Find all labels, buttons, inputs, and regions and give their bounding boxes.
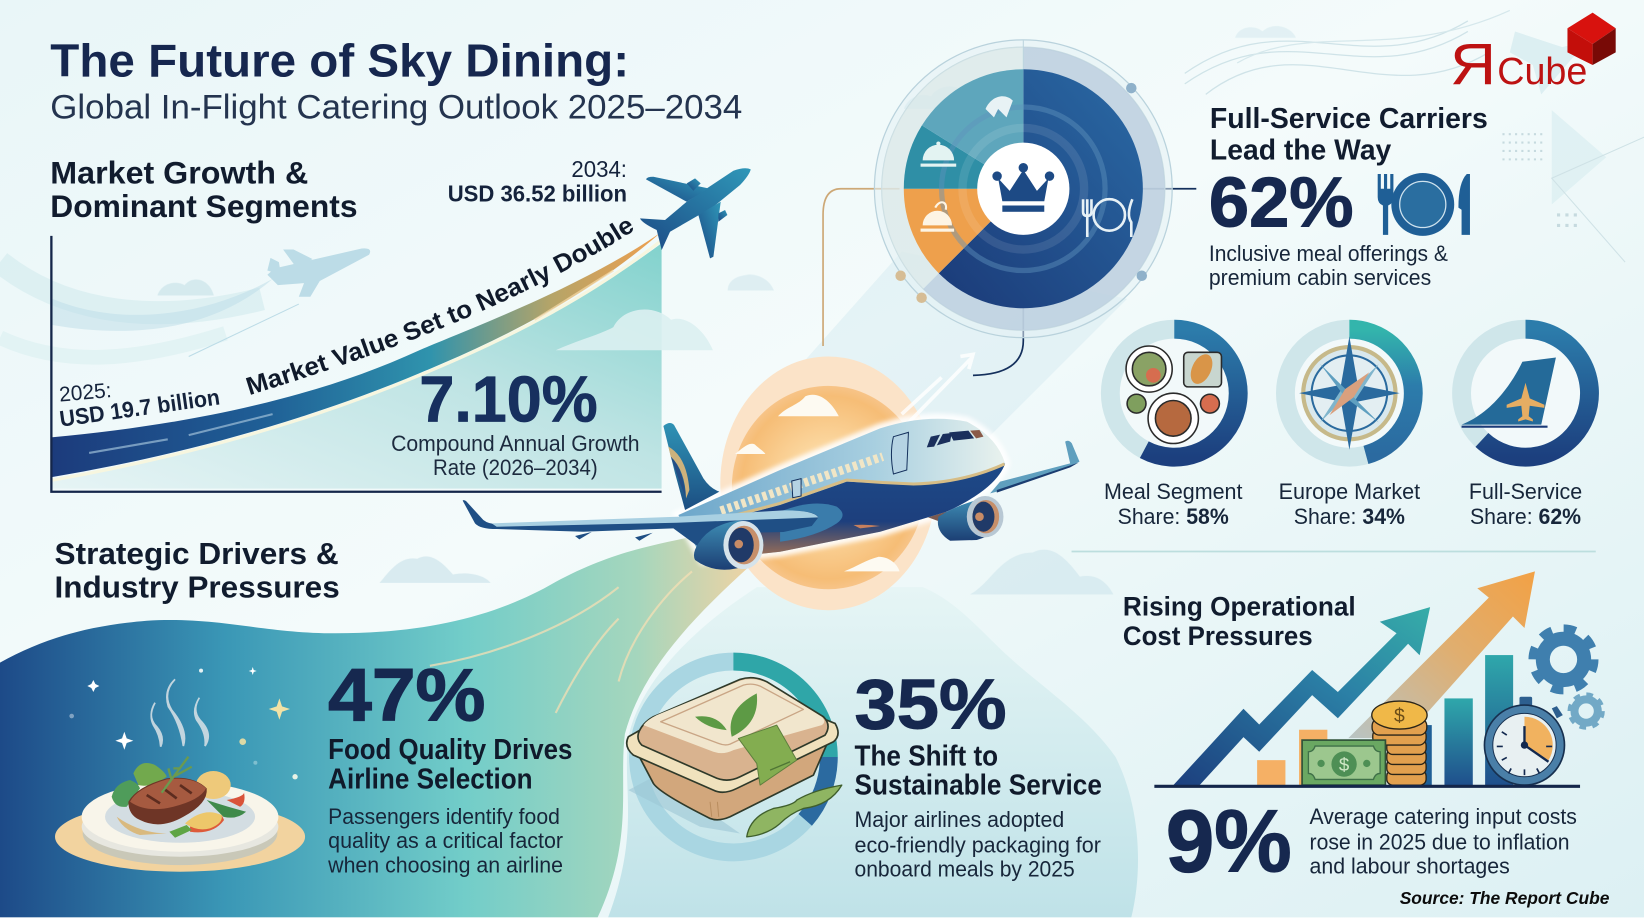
heading: strategic drivers: [55, 537, 340, 605]
tail fin: [663, 423, 719, 510]
decorative sky swooshes: [0, 10, 1644, 357]
icon: main airliner: [463, 419, 1079, 570]
labels: share donuts: Full-Service: [1469, 479, 1582, 504]
labels: share donuts: [1104, 479, 1582, 529]
cockpit: [927, 433, 952, 447]
text: cost description: rose in 2025 due to inflation: [1310, 829, 1570, 854]
chart: full-service donut: [1462, 329, 1589, 457]
sun behind plane: [720, 356, 936, 610]
stat: food quality: Passengers identify food: [328, 804, 560, 829]
chart: europe market donut: [1285, 329, 1413, 457]
heading: rising costs: [1123, 590, 1356, 651]
chart: main donut: [874, 40, 1172, 338]
stat: sustainable service: 35%: [855, 665, 1007, 744]
arrow: zigzag trend: [1173, 607, 1430, 785]
heading: strategic drivers: Industry Pressures: [55, 571, 340, 605]
text: full-service description: [1209, 241, 1448, 290]
stat: food quality: quality as a critical factor: [328, 828, 563, 853]
labels: share donuts: Meal Segment: [1104, 479, 1242, 504]
far engine: [922, 512, 947, 522]
windows: [721, 457, 883, 511]
heading: full-service carriers: Full-Service Carriers: [1210, 102, 1488, 134]
far wing: [990, 441, 1079, 493]
icon: fork and plate: [1083, 199, 1132, 237]
icon: aircraft tail: [1462, 358, 1556, 427]
icon: banknote: [1302, 740, 1385, 785]
segment: blue 62%: [939, 69, 1143, 308]
label: 2034 value: 2034:: [571, 156, 627, 182]
heading: rising costs: Rising Operational: [1123, 590, 1356, 621]
icon: small gear: [1569, 694, 1603, 728]
stat: food quality: when choosing an airline: [327, 852, 563, 877]
stat: sustainable service: The Shift to: [855, 739, 998, 771]
airflow streaks: [430, 571, 692, 713]
icon: coin stack: [1372, 701, 1427, 785]
heading: strategic drivers: Strategic Drivers &: [55, 537, 339, 571]
doors: [891, 432, 908, 474]
curve label: Market Value Set to Nearly Double: [246, 220, 633, 395]
segment: light teal: [922, 69, 1023, 189]
icon: fork plate knife: [1378, 173, 1470, 236]
stat: food quality: Food Quality Drives: [328, 733, 572, 765]
stat: CAGR: 7.10%: [419, 362, 598, 435]
stat: CAGR: [391, 362, 640, 480]
stat: sustainable service: eco-friendly packaging for: [855, 832, 1101, 857]
labels: share donuts: Share: 34%: [1294, 504, 1405, 529]
stat: CAGR: Rate (2026–2034): [433, 455, 598, 480]
stat: food quality: [327, 653, 572, 877]
segment: orange: [904, 189, 1023, 273]
bottom panel: food quality wave: [0, 535, 750, 917]
heading: market growth: Dominant Segments: [50, 189, 358, 224]
logo: RCube: Cube: [1497, 50, 1587, 92]
icon: meals: [1126, 346, 1221, 444]
text: full-service description: Inclusive meal offerings &: [1209, 241, 1448, 266]
stat: 62 percent: 62%: [1209, 162, 1354, 241]
text: full-service description: premium cabin services: [1209, 265, 1431, 290]
label: 2025 value: 2025:: [58, 379, 112, 407]
stat: cost rise: 9%: [1166, 791, 1292, 890]
chart: meal segment donut: [1110, 329, 1238, 457]
icon: crown: [992, 163, 1054, 212]
fuselage: [678, 419, 1005, 560]
logo: RCube: [1450, 13, 1616, 97]
title: The Future of Sky Dining:: [50, 35, 629, 87]
heading: full-service carriers: Lead the Way: [1210, 133, 1392, 165]
wing fairing: [780, 503, 843, 542]
stat: sustainable service: onboard meals by 2025: [855, 857, 1075, 882]
logo: RCube: Я: [1450, 32, 1496, 97]
stat: sustainable service: [855, 665, 1102, 882]
stat: food quality: Airline Selection: [328, 762, 533, 794]
label: 2034 value: USD 36.52 billion: [448, 180, 627, 206]
bars: [1257, 655, 1513, 786]
icon: motion arrows: [891, 354, 973, 440]
source note: Source: The Report Cube: [1400, 888, 1609, 908]
stat: CAGR: Compound Annual Growth: [391, 431, 640, 456]
bottom panel: pale sustainability wave: [608, 587, 1138, 917]
arrow: orange trend: [1348, 571, 1535, 738]
icon: large gear: [1532, 628, 1594, 690]
icon: stopwatch: [1484, 697, 1564, 785]
labels: share donuts: Share: 58%: [1118, 504, 1229, 529]
label: 2025 value: USD 19.7 billion: [58, 384, 221, 432]
icon: plane at chart peak: [640, 168, 751, 258]
heading: full-service carriers: [1210, 102, 1488, 165]
icon: service bell: [921, 142, 956, 167]
label: 2034 value: [448, 156, 627, 206]
light beam behind donut: [734, 252, 1127, 524]
heading: market growth: Market Growth &: [50, 155, 308, 190]
chart: market growth curve: [51, 233, 713, 492]
faded plane in chart background: [52, 248, 370, 356]
icon: plated meal: [55, 667, 305, 872]
stat: sustainable service: Sustainable Service: [855, 769, 1102, 801]
icon: compass: [1299, 337, 1400, 450]
heading: rising costs: Cost Pressures: [1123, 620, 1313, 651]
icon: banknote: $: [1339, 754, 1350, 775]
text: cost description: Average catering input costs: [1310, 804, 1577, 829]
subtitle: Global In-Flight Catering Outlook 2025–2034: [50, 88, 742, 126]
text: cost description: [1310, 804, 1577, 878]
icon: eco packaging ring and box: [627, 662, 842, 852]
near engine: [694, 521, 763, 570]
icon: top segment emblem: [986, 96, 1013, 117]
clouds: [157, 26, 1296, 594]
text: cost description: and labour shortages: [1310, 853, 1510, 878]
labels: share donuts: Europe Market: [1279, 479, 1420, 504]
labels: share donuts: Share: 62%: [1470, 504, 1581, 529]
icons: money, coins, stopwatch, gears: [1302, 628, 1603, 785]
segment: teal: [904, 125, 1023, 189]
chart: rising costs illustration: [1154, 571, 1603, 786]
near wing: [463, 500, 818, 547]
icon: coin stack: $: [1394, 706, 1405, 727]
connectors: [823, 189, 1196, 375]
icon: orange cloche: [921, 202, 954, 232]
stat: sustainable service: Major airlines adopted: [855, 807, 1064, 832]
stat: food quality: 47%: [328, 653, 485, 736]
heading: market growth: [50, 155, 358, 224]
